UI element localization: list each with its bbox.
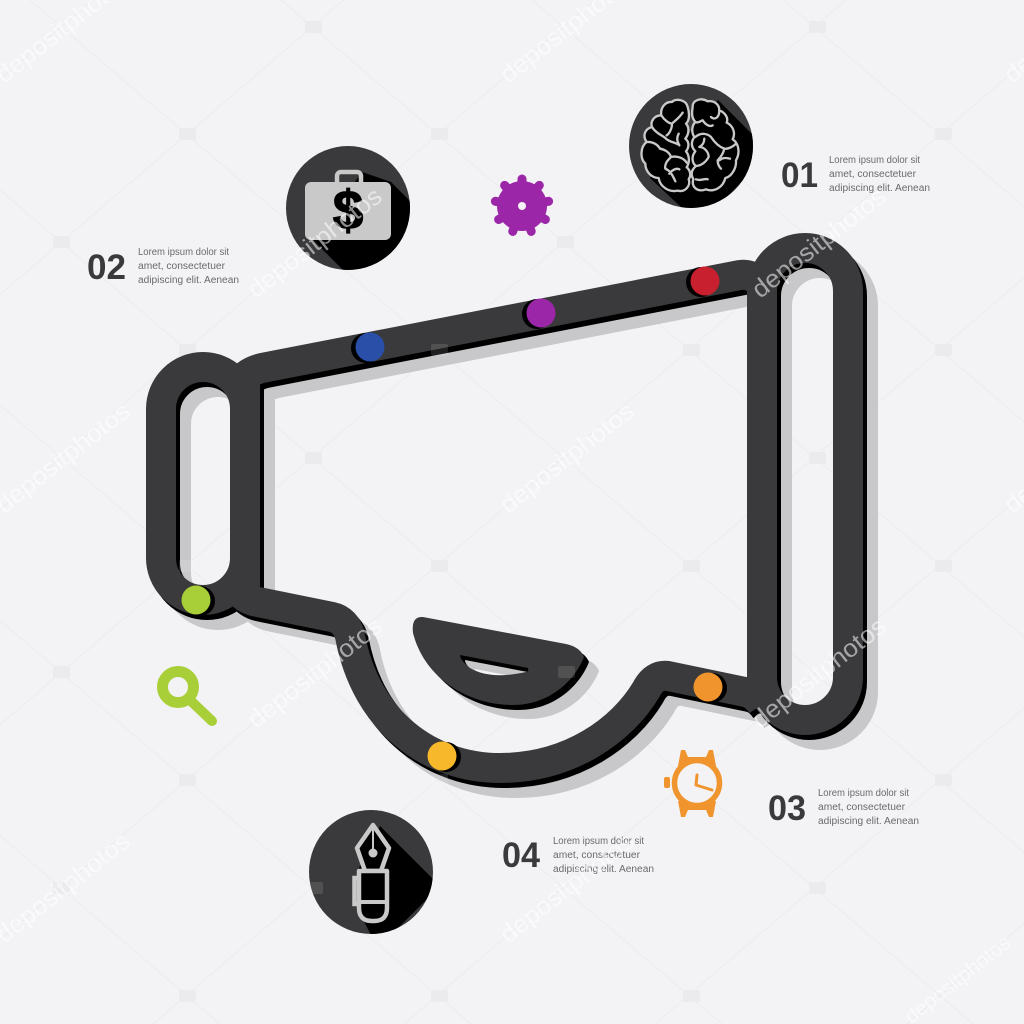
icon: gear [495, 179, 549, 231]
watermark overlay: depositphotos [243, 612, 387, 734]
text block 01: amet, consectetuer [829, 169, 917, 180]
text block 03: Lorem ipsum dolor sit [818, 788, 909, 799]
watermark overlay: depositphotos [747, 612, 891, 734]
megaphone mouth detail shape [413, 617, 599, 719]
text block 03: adipiscing elit. Aenean [818, 816, 919, 827]
text block 03 [818, 788, 919, 827]
number 01: 01 [781, 156, 818, 195]
icon: watch [664, 750, 720, 817]
text block 04: Lorem ipsum dolor sit [553, 836, 644, 847]
pen nib [357, 825, 389, 871]
icon: briefcase badge [286, 146, 410, 270]
text block 02: adipiscing elit. Aenean [138, 275, 239, 286]
brain right hemisphere [692, 99, 738, 190]
text block 04: adipiscing elit. Aenean [553, 864, 654, 875]
brain folds [647, 110, 736, 181]
number 03: 03 [768, 789, 806, 828]
watermark overlay: depositphotos [495, 397, 639, 519]
number 02: 02 [87, 248, 126, 287]
number 04: 04 [502, 836, 541, 875]
marker: yellow [428, 742, 461, 772]
megaphone dark body [161, 248, 848, 768]
brain left hemisphere [641, 100, 690, 191]
icon: fountain pen badge [309, 810, 433, 934]
callout 04 [502, 836, 654, 875]
callout 03 [768, 788, 919, 828]
text block 03: amet, consectetuer [818, 802, 906, 813]
pen barrel [359, 871, 387, 921]
dollar sign: $ [333, 179, 363, 241]
watermark overlay: depositphotos [243, 182, 387, 304]
marker: blue [351, 332, 384, 363]
watermark overlay: depositphotos [495, 827, 639, 949]
megaphone black edge shadow [165, 253, 852, 773]
text block 02 [138, 247, 239, 286]
timeline markers [182, 266, 727, 772]
callout 02 [87, 247, 239, 287]
briefcase handle [337, 172, 361, 186]
text block 01: Lorem ipsum dolor sit [829, 155, 920, 166]
briefcase body [305, 182, 391, 240]
watermark overlay: depositphotos [747, 182, 891, 304]
megaphone grey long shadow [176, 263, 863, 783]
megaphone timeline outline [161, 248, 863, 783]
text block 02: amet, consectetuer [138, 261, 226, 272]
text block 02: Lorem ipsum dolor sit [138, 247, 229, 258]
marker: red [686, 266, 720, 297]
marker: green [182, 586, 215, 616]
marker: purple [522, 298, 556, 329]
icon: magnifier [162, 672, 212, 721]
text block 04: amet, consectetuer [553, 850, 641, 861]
text block 01: adipiscing elit. Aenean [829, 183, 930, 194]
text block 01 [829, 155, 930, 194]
icon: brain badge [629, 84, 753, 208]
text block 04 [553, 836, 654, 875]
marker: orange [694, 672, 727, 703]
callout 01 [781, 155, 930, 195]
